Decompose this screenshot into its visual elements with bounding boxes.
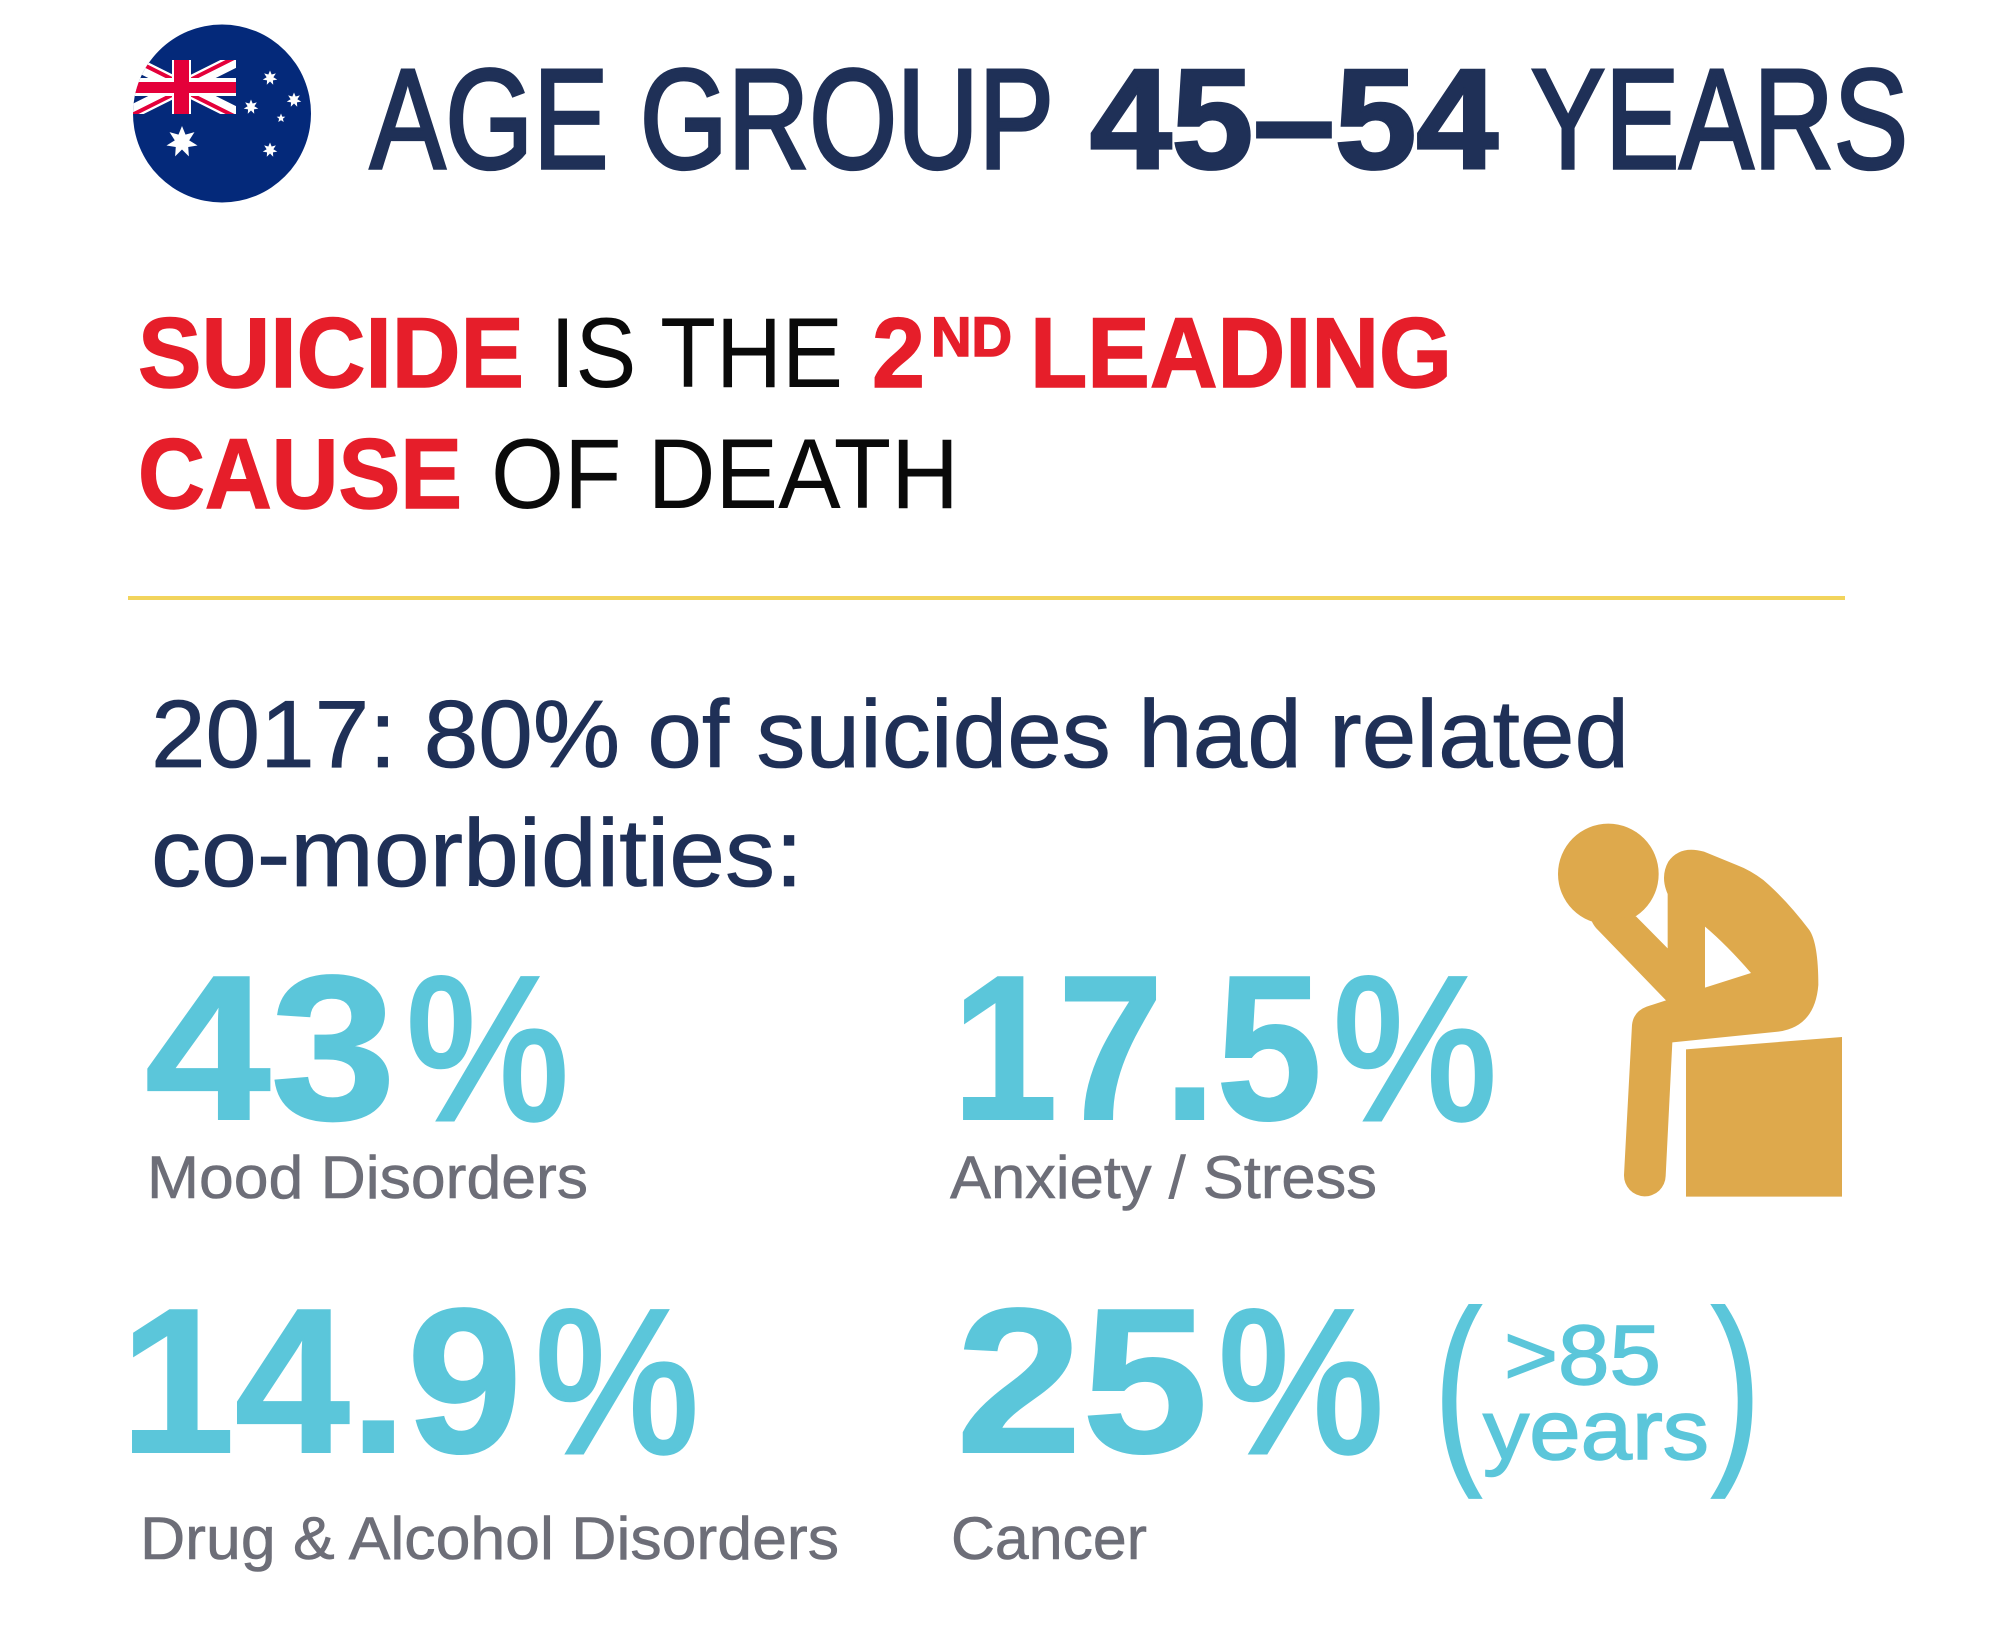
stat: 25% cancer over 85 years: ( (1434, 1268, 1482, 1499)
icon: person sitting with head in hand (1558, 824, 1842, 1197)
stat: 14.9% drug and alcohol disorders: % (535, 1268, 699, 1496)
title: YEARS (1531, 40, 1908, 199)
text block: co-morbidities intro: co-morbidities: (151, 800, 803, 907)
heading: suicide is the 2nd leading cause of death: 2 (872, 297, 925, 408)
stat: 43% mood disorders: 43 (145, 933, 396, 1163)
heading: suicide is the 2nd leading cause of death: IS THE (550, 297, 843, 408)
stat: 25% cancer over 85 years (951, 1266, 1761, 1572)
text block: co-morbidities intro (151, 681, 1629, 907)
stat: 17.5% anxiety / stress: 17.5 (952, 933, 1322, 1163)
text block: co-morbidities intro: 2017: 80% of suicides had related (151, 681, 1629, 788)
stat: 14.9% drug and alcohol disorders (120, 1266, 839, 1572)
stat: 17.5% anxiety / stress: % (1333, 935, 1497, 1163)
heading: suicide is the 2nd leading cause of death: OF DEATH (491, 418, 959, 529)
heading: suicide is the 2nd leading cause of death: LEADING (1030, 297, 1452, 408)
stat: 25% cancer over 85 years: ) (1711, 1268, 1761, 1499)
stat: 25% cancer over 85 years: >85 (1504, 1308, 1661, 1402)
icon: Australian flag badge (133, 24, 311, 202)
stat: 14.9% drug and alcohol disorders: 14.9 (120, 1266, 522, 1496)
stat: 14.9% drug and alcohol disorders: Drug & Alcohol Disorders (140, 1505, 839, 1572)
stat: 25% cancer over 85 years: % (1218, 1268, 1384, 1496)
stat: 43% mood disorders (145, 933, 588, 1211)
heading: suicide is the 2nd leading cause of death: ND (931, 305, 1012, 368)
title: 45–54 (1090, 40, 1498, 199)
heading: suicide is the 2nd leading cause of death (138, 297, 1452, 529)
title (370, 40, 1908, 199)
stat: 43% mood disorders: Mood Disorders (147, 1144, 588, 1211)
stat: 25% cancer over 85 years: 25 (956, 1266, 1208, 1496)
stat: 17.5% anxiety / stress (950, 933, 1497, 1211)
stat: 17.5% anxiety / stress: Anxiety / Stress (950, 1144, 1377, 1211)
stat: 43% mood disorders: % (406, 935, 569, 1163)
title: AGE GROUP (370, 40, 1054, 199)
heading: suicide is the 2nd leading cause of death: CAUSE (138, 418, 462, 529)
stat: 25% cancer over 85 years: years (1483, 1383, 1709, 1477)
heading: suicide is the 2nd leading cause of death: SUICIDE (138, 297, 524, 408)
stat: 25% cancer over 85 years: Cancer (951, 1505, 1147, 1572)
